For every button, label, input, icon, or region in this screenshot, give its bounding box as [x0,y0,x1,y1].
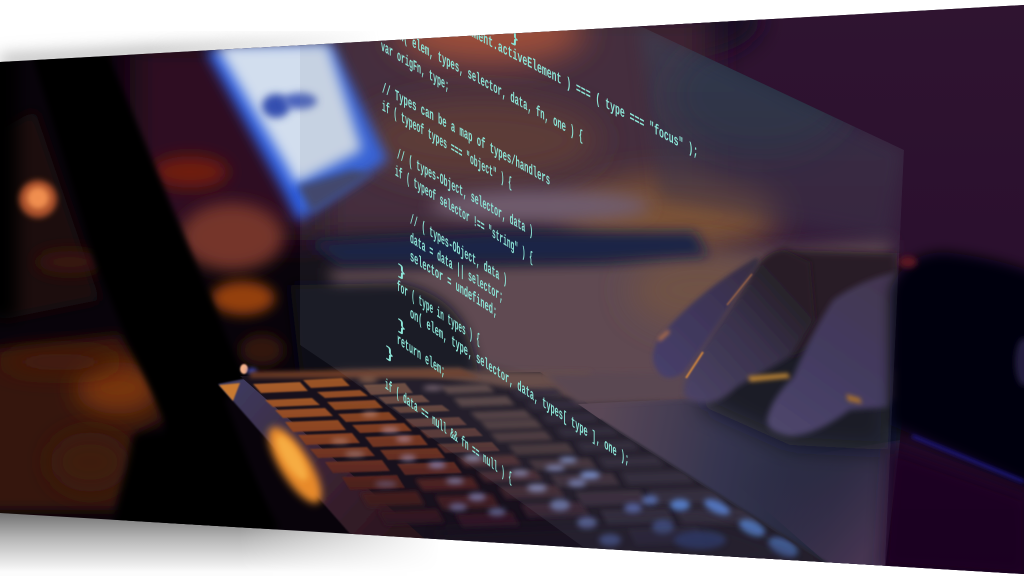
code text lines: } [385,343,394,367]
hand shadow [694,346,898,460]
left reddish triangle [14,114,97,316]
keys column 3 [363,383,500,453]
back of hand [782,246,898,354]
code text lines: } [397,315,406,339]
code text lines: document.activeElement ) === ( type === "focus" ); [454,15,698,161]
palm rest surface [545,370,905,570]
finger orange rims [659,331,669,340]
finger 3 [767,272,897,436]
finger 1 [653,257,759,378]
left column darkness [0,50,18,320]
keyboard deck [240,372,830,562]
foreground laptop lid edge [32,55,275,530]
keys column 2 [303,378,462,475]
code text lines: data = data || selector; [410,229,503,306]
translucent code panel [300,0,904,566]
code text lines: on( elem, types, selector, data, fn, one ) { [395,25,583,146]
right side dark hand outside panel [880,252,1024,576]
keys column 2 far [415,477,520,528]
finger 2 [684,250,815,403]
keyboard keys [253,378,760,545]
code text lines: } [510,28,519,49]
wooden table [0,334,165,510]
keys column 3 far [457,455,590,518]
background: purple wall right [660,0,1024,576]
keys column 5 [510,388,760,525]
code text lines: return elem; [397,331,445,382]
code text lines [381,15,698,489]
key light reflections [331,378,801,561]
drop shadow: top left [0,34,336,62]
background: desk mauve [330,240,890,405]
blurred dark object under panel [290,283,480,374]
code text lines: } [397,260,406,283]
bokeh blobs [152,156,284,366]
code text lines: for ( type in types ) { [397,277,480,349]
keys column 1 far [360,491,445,525]
background: dark blurred device band [310,232,708,264]
code text lines: var origFn, type; [381,37,449,95]
code text lines: if ( typeof types === "object" ) { [382,97,512,193]
keys column 4 [440,384,705,545]
background: middle room haze [130,0,780,253]
code text lines: // Types can be a map of types/handlers [382,80,550,190]
code text lines: selector = undefined; [410,247,497,321]
bottom key haze [446,518,798,558]
code text lines: // ( types-Object, selector, data ) [397,146,533,241]
bokeh orange light [19,180,57,218]
keys column 1 [253,382,405,490]
laptop screen in background [205,44,388,222]
code text lines: // ( types-Object, data ) [410,210,507,289]
code text lines: if ( typeof selector !== "string" ) { [395,162,533,267]
drop shadow: bottom left [0,513,417,570]
laptop body side edge [218,363,424,538]
right hand [653,250,897,450]
